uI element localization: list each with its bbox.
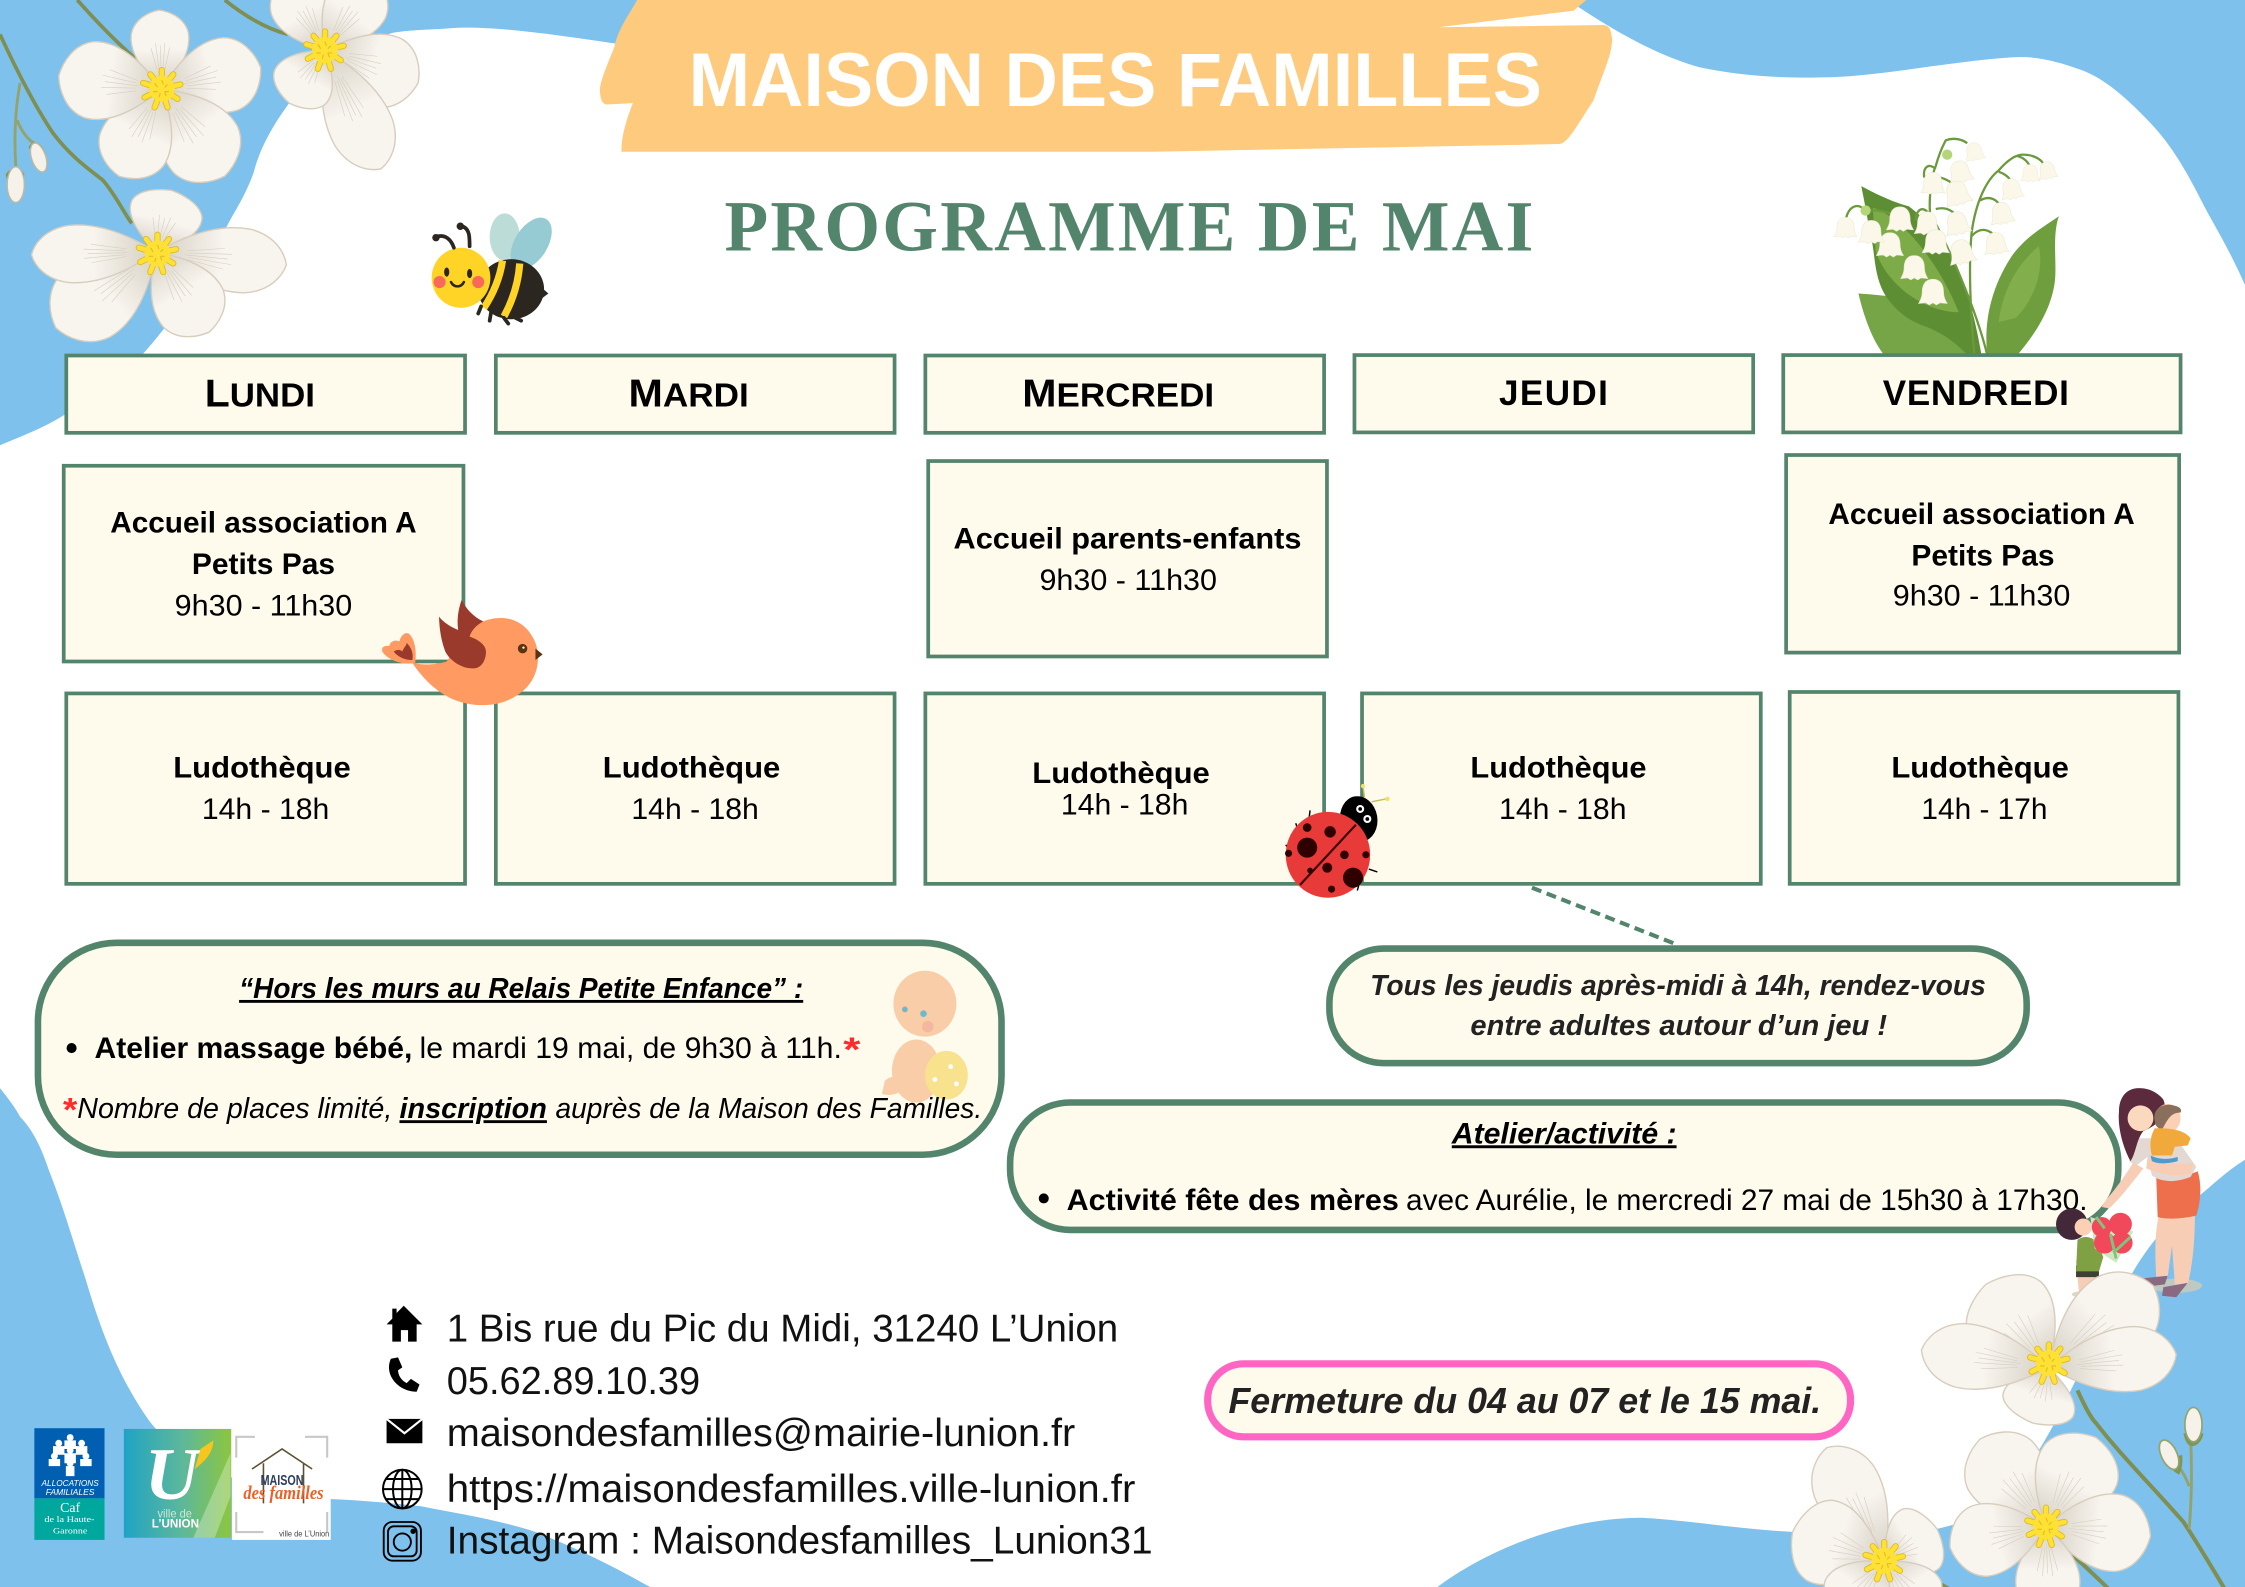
card: lundi ludotheque — [66, 693, 465, 884]
background blob: bottom right — [1437, 1160, 2245, 1587]
phone number: 05.62.89.10.39 — [447, 1360, 700, 1403]
background blob: bottom left — [0, 1088, 650, 1587]
header: lundi: LUNDI — [205, 373, 315, 416]
activity line — [94, 1031, 861, 1069]
illustration: mother and children — [2056, 1088, 2202, 1298]
icon: bee — [432, 210, 560, 324]
header: jeudi: JEUDI — [1499, 374, 1608, 413]
card: jeudi ludotheque: 14h - 18h — [1499, 793, 1626, 826]
activity line: Activité fête des mères — [1067, 1184, 1399, 1217]
logo: maison des familles: des familles — [243, 1483, 324, 1504]
flower: right lower — [1942, 1414, 2154, 1587]
logo: caf: ALLOCATIONS — [41, 1478, 99, 1488]
heading: Atelier/activité : — [1451, 1117, 1677, 1150]
logo: ville de l'union — [124, 1429, 231, 1538]
footnote: Nombre de places limité, — [77, 1093, 392, 1125]
header: lundi — [66, 356, 465, 433]
panel: jeudis callout: entre adultes autour d’un jeu ! — [1470, 1010, 1888, 1042]
card: vendredi ludotheque: Ludothèque — [1891, 751, 2069, 784]
dashed connector arrow — [1532, 888, 1678, 945]
card: jeudi ludotheque: Ludothèque — [1470, 751, 1647, 784]
panel: atelier activite — [1010, 1102, 2118, 1230]
icon: home — [387, 1306, 422, 1342]
logo: maison des familles — [232, 1434, 331, 1540]
card: mercredi accueil: 9h30 - 11h30 — [1039, 564, 1217, 597]
card: lundi accueil: 9h30 - 11h30 — [175, 590, 352, 623]
contact list — [383, 1306, 1153, 1562]
logo: caf: Caf — [60, 1500, 81, 1515]
header: mardi — [496, 356, 895, 433]
icon: ladybug — [1285, 784, 1390, 898]
activity line — [1067, 1184, 2088, 1217]
card: vendredi accueil — [1786, 455, 2179, 653]
footnote: inscription — [399, 1093, 547, 1125]
card: mercredi accueil: Accueil parents-enfants — [954, 522, 1301, 555]
background blob: top left — [0, 0, 659, 445]
header: mercredi — [925, 356, 1324, 433]
flower: top edge — [259, 0, 430, 182]
card: vendredi accueil: Petits Pas — [1911, 540, 2055, 573]
bullet — [67, 1043, 77, 1053]
card: vendredi accueil: Accueil association A — [1828, 498, 2135, 531]
card: lundi ludotheque: 14h - 18h — [202, 793, 329, 826]
instagram handle: Instagram : Maisondesfamilles_Lunion31 — [447, 1519, 1153, 1562]
heading: “Hors les murs au Relais Petite Enfance” : — [239, 973, 803, 1005]
icon: mail — [387, 1419, 422, 1443]
email: maisondesfamilles@mairie-lunion.fr — [447, 1412, 1075, 1455]
footnote — [63, 1091, 982, 1128]
address: 1 Bis rue du Pic du Midi, 31240 L’Union — [447, 1308, 1118, 1351]
flower: top left upper — [54, 9, 269, 200]
card: lundi accueil: Petits Pas — [192, 548, 335, 581]
background blob: top right — [1568, 0, 2245, 285]
panel: hors les murs — [38, 943, 1002, 1155]
activity line: Atelier massage bébé, — [94, 1032, 412, 1065]
card: vendredi accueil: 9h30 - 11h30 — [1893, 580, 2070, 613]
header: mercredi: MERCREDI — [1022, 373, 1214, 416]
header: vendredi: VENDREDI — [1883, 374, 2069, 413]
logo: ville de l'union: U — [145, 1434, 202, 1516]
icon: phone — [389, 1357, 420, 1392]
card: mercredi ludotheque: Ludothèque — [1032, 757, 1210, 790]
icon: bird — [382, 600, 543, 705]
website: https://maisondesfamilles.ville-lunion.fr — [447, 1468, 1136, 1511]
title banner — [600, 0, 1612, 152]
card: lundi ludotheque: Ludothèque — [173, 751, 351, 784]
illustration: lily of the valley — [1834, 139, 2059, 355]
panel: day headers — [66, 355, 2181, 433]
card: jeudi ludotheque — [1362, 693, 1761, 884]
card: mardi ludotheque — [496, 693, 895, 884]
card: vendredi ludotheque — [1790, 692, 2178, 884]
flower: right upper — [1917, 1253, 2179, 1434]
card: mardi ludotheque: 14h - 18h — [631, 793, 759, 826]
card: mardi ludotheque: Ludothèque — [603, 751, 780, 784]
card: mercredi ludotheque: 14h - 18h — [1061, 789, 1188, 822]
decoration: blossom branch top left — [0, 0, 430, 360]
card: mercredi accueil — [928, 461, 1327, 656]
panel: jeudis callout: Tous les jeudis après-midi à 14h, rendez-vous — [1370, 970, 1986, 1002]
icon: globe — [383, 1470, 422, 1508]
header: mardi: MARDI — [629, 373, 749, 416]
activity line: le mardi 19 mai, de 9h30 à 11h. — [420, 1032, 842, 1065]
footnote: * — [63, 1091, 78, 1128]
logo: caf: Garonne — [53, 1525, 88, 1535]
logo: maison des familles: MAISON — [261, 1472, 304, 1489]
panel: jeudis callout — [1329, 949, 2027, 1063]
activity line: * — [843, 1031, 861, 1069]
logo: caf — [34, 1428, 105, 1540]
logo: ville de l'union: L’UNION — [152, 1517, 199, 1531]
footnote: auprès de la Maison des Familles. — [556, 1093, 982, 1125]
header: jeudi — [1354, 355, 1753, 432]
callout: fermeture — [1208, 1364, 1851, 1437]
flower: bottom edge — [1780, 1432, 1955, 1587]
icon: baby — [882, 971, 968, 1102]
subtitle: PROGRAMME DE MAI — [724, 188, 1533, 267]
activity line: avec Aurélie, le mercredi 27 mai de 15h30 à 17h30. — [1406, 1184, 2088, 1217]
card: lundi accueil — [64, 466, 463, 661]
flower: left lower — [31, 181, 290, 360]
decoration: blossom branch bottom right — [1780, 1253, 2225, 1587]
title text: MAISON DES FAMILLES — [689, 38, 1542, 123]
logo: maison des familles: ville de L’Union — [279, 1528, 330, 1538]
callout: fermeture: Fermeture du 04 au 07 et le 15 mai. — [1228, 1381, 1821, 1421]
logo: caf: de la Haute- — [44, 1514, 95, 1524]
logo: ville de l'union: ville de — [157, 1507, 192, 1521]
card: vendredi ludotheque: 14h - 17h — [1921, 793, 2047, 826]
header: vendredi — [1783, 355, 2181, 432]
icon: instagram — [384, 1522, 421, 1561]
logo: caf: FAMILIALES — [46, 1487, 95, 1497]
card: mercredi ludotheque — [925, 693, 1324, 884]
card: lundi accueil: Accueil association A — [110, 507, 417, 540]
bullet — [1039, 1193, 1049, 1203]
